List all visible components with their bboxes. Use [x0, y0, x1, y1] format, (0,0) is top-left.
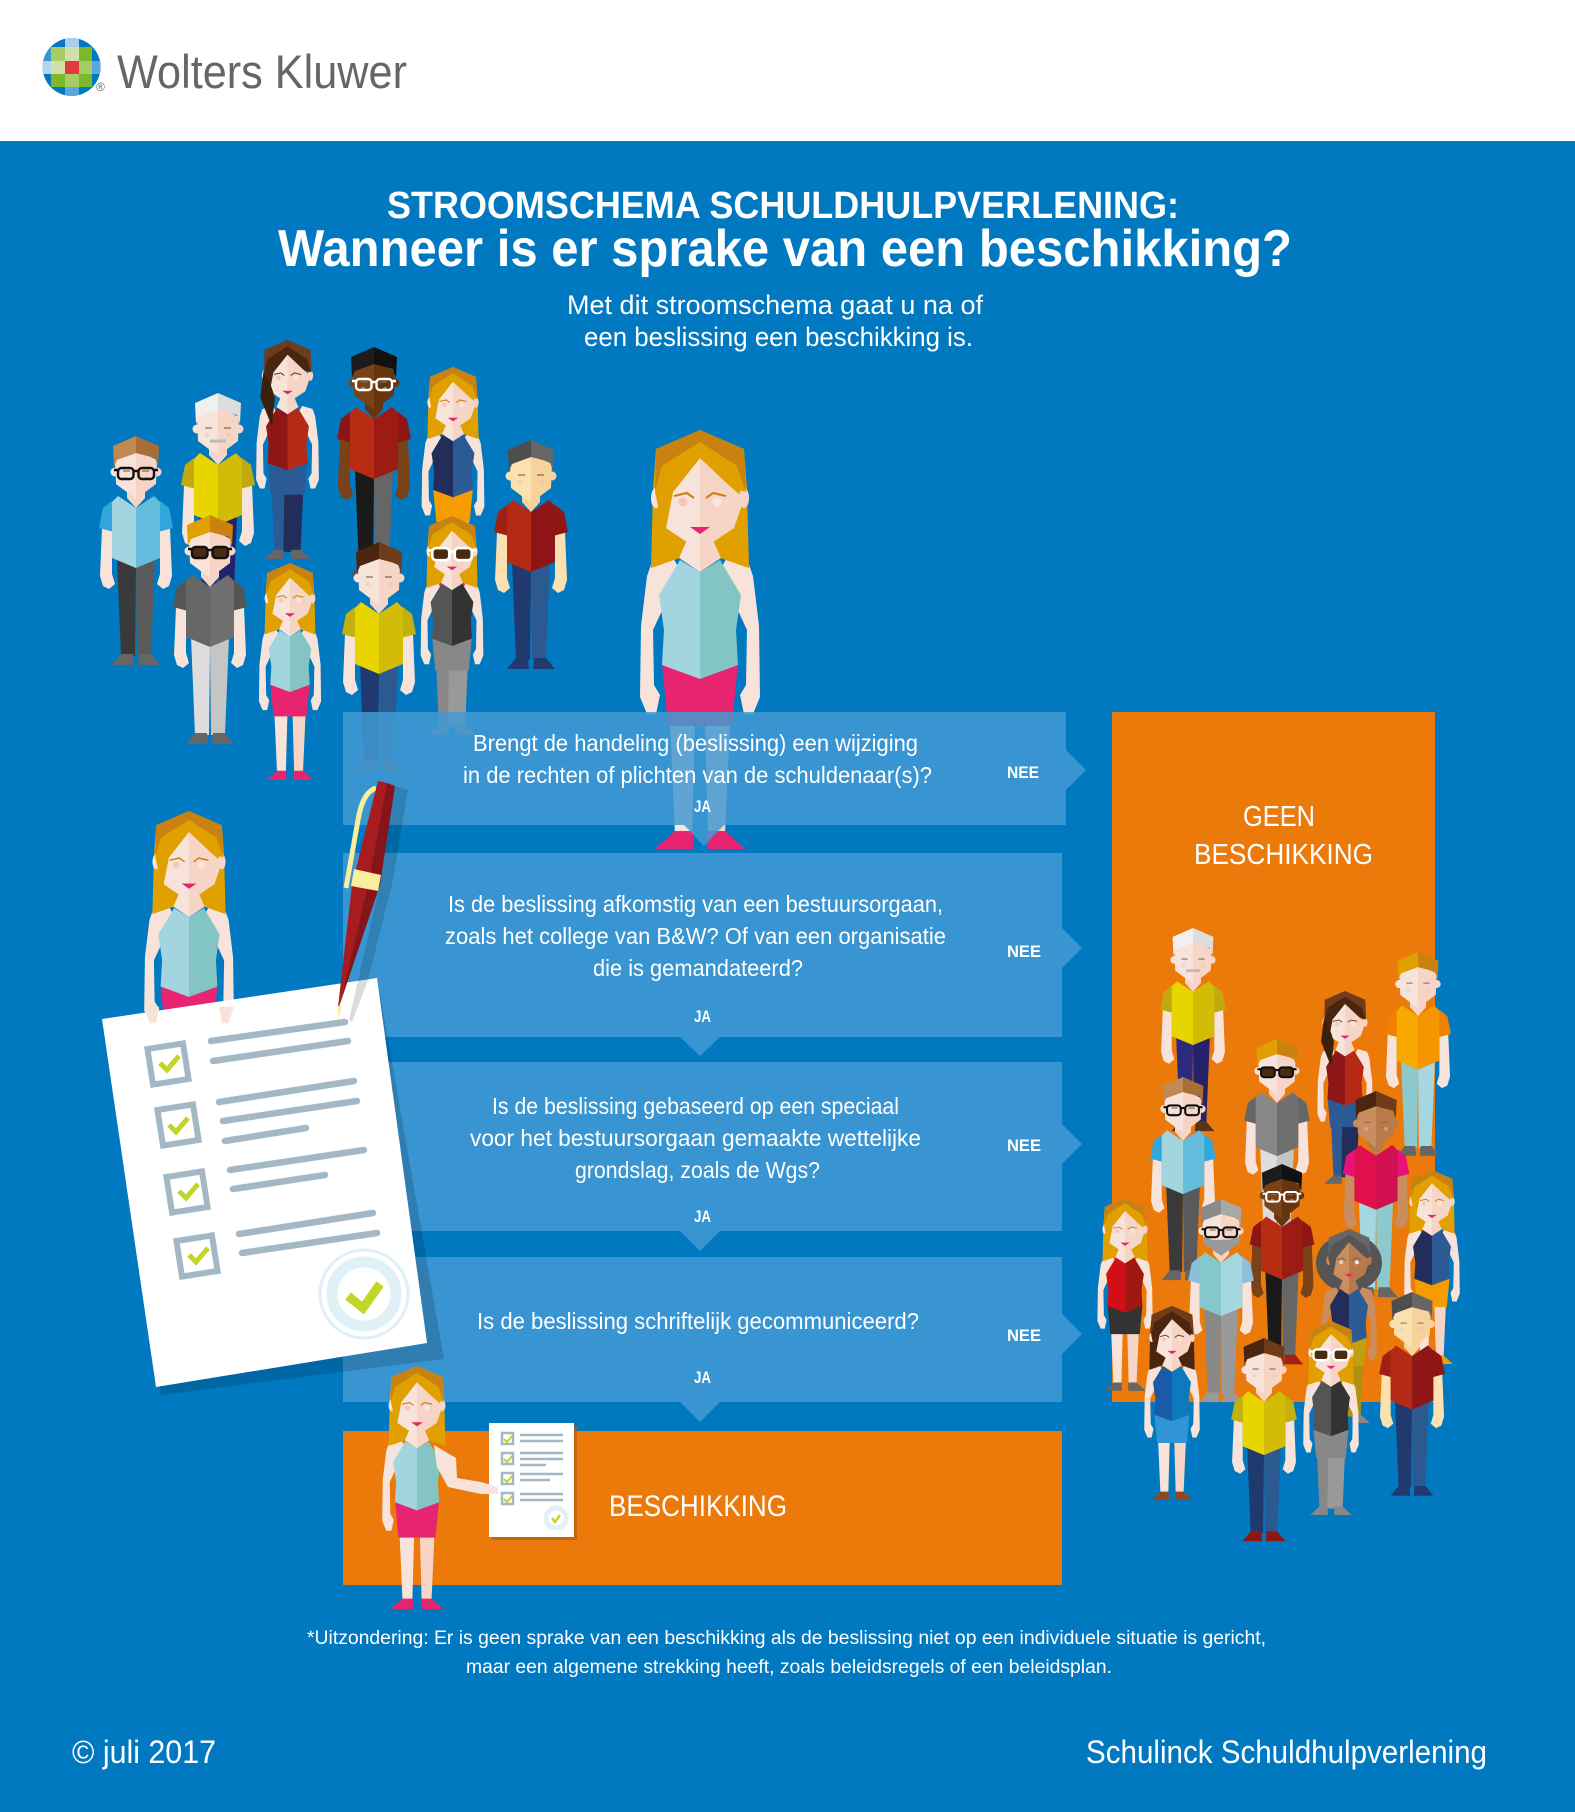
paper shadow — [150, 982, 444, 1395]
person: woman red top, black skirt — [1097, 1198, 1153, 1391]
illustration: woman presenting document — [382, 1366, 577, 1609]
checkboxes — [147, 1043, 218, 1277]
person: man sunglasses, grey shirt — [173, 515, 247, 744]
person: man brown hair, yellow shirt — [1231, 1338, 1297, 1541]
person: blond woman, navy top — [422, 367, 484, 586]
panel: question 4 — [343, 1257, 1082, 1422]
pen shadow — [349, 786, 408, 1022]
pen band — [351, 869, 381, 891]
pen tip — [338, 1006, 342, 1020]
person: woman behind paper — [144, 811, 234, 1124]
person: man tan skin, pink shirt — [1343, 1091, 1409, 1297]
person: man dark hair, red shirt — [494, 440, 568, 669]
pen body — [338, 781, 387, 1007]
result label: GEEN — [1243, 801, 1315, 833]
footnote — [307, 1628, 1266, 1678]
label: ja: JA — [694, 1207, 711, 1226]
title block — [278, 185, 1292, 352]
label: nee: NEE — [1007, 763, 1039, 782]
intro text — [567, 290, 983, 352]
label: ja: JA — [694, 1368, 711, 1387]
person: woman brown hair, blue top — [1144, 1306, 1200, 1500]
logo: Wolters Kluwer — [42, 37, 407, 98]
icon: logo globe — [42, 37, 102, 97]
question text — [445, 891, 946, 981]
panel shape with arrows — [343, 853, 1082, 1056]
label: nee: NEE — [1007, 1326, 1041, 1345]
person: man with glasses, blue shirt — [99, 436, 173, 665]
kicker heading: STROOMSCHEMA SCHULDHULPVERLENING: — [387, 185, 1179, 227]
checklist lines — [211, 1022, 377, 1253]
intro text: een beslissing een beschikking is. — [584, 322, 973, 352]
person: woman sunglasses, black vest — [1303, 1321, 1359, 1515]
registered mark: ® — [96, 80, 105, 94]
panel shape with arrows — [343, 1257, 1082, 1422]
box: geen beschikking — [1112, 712, 1435, 1402]
panel: question 2 — [343, 853, 1082, 1056]
label: nee: NEE — [1007, 942, 1041, 961]
result label: BESCHIKKING — [1194, 839, 1373, 871]
person: man brown hair, yellow shirt — [342, 542, 416, 771]
person: blond man, orange shirt — [1385, 952, 1451, 1156]
person: older man, yellow shirt — [181, 393, 255, 622]
pen clip — [346, 788, 376, 888]
footer: date: © juli 2017 — [72, 1734, 216, 1770]
panel: question 3 — [343, 1062, 1082, 1251]
question text: Is de beslissing gebaseerd op een speciaal — [492, 1093, 899, 1119]
question text: Is de beslissing schriftelijk gecommuniceerd? — [477, 1308, 919, 1334]
person: woman dark hair, red top — [1317, 991, 1373, 1184]
footnote: maar een algemene strekking heeft, zoals beleidsregels of een beleidsplan. — [466, 1657, 1112, 1678]
question text — [470, 1093, 921, 1183]
question text: Brengt de handeling (beslissing) een wijziging — [473, 730, 918, 756]
illustration: woman holding checklist — [102, 811, 444, 1395]
paper sheet — [102, 978, 427, 1387]
white header band — [0, 0, 1575, 141]
panel shape with arrows — [343, 1062, 1082, 1251]
pointing arm — [434, 1445, 498, 1494]
footer: source: Schulinck Schuldhulpverlening — [1086, 1734, 1487, 1770]
person: woman — [382, 1366, 452, 1609]
person: bearded man, light shirt — [1188, 1199, 1254, 1402]
person: man dark skin, white glasses — [337, 347, 411, 576]
orange result box — [343, 1431, 1062, 1585]
question text: grondslag, zoals de Wgs? — [575, 1157, 820, 1183]
person: man dark hair, red shirt — [1379, 1292, 1445, 1496]
stamp with check — [320, 1250, 408, 1338]
question text: Is de beslissing afkomstig van een bestuursorgaan, — [448, 891, 943, 917]
person: woman afro hair, navy top — [1316, 1229, 1382, 1423]
panel: question 1 — [343, 712, 1086, 846]
illustration: large woman behind first panel — [640, 430, 760, 849]
mini document — [489, 1423, 577, 1540]
question text: in de rechten of plichten van de schuldenaar(s)? — [463, 762, 932, 788]
question text — [463, 730, 932, 788]
label: ja: JA — [694, 1007, 711, 1026]
question text: voor het bestuursorgaan gemaakte wettelijke — [470, 1125, 921, 1151]
illustration: crowd top left — [99, 340, 568, 780]
illustration: crowd right — [1097, 928, 1460, 1541]
person: man sunglasses, grey shirt — [1244, 1039, 1310, 1242]
logo wordmark: Wolters Kluwer — [117, 45, 407, 98]
person: blond woman, navy top — [1404, 1170, 1460, 1364]
result label — [1194, 801, 1373, 871]
question text: zoals het college van B&W? Of van een organisatie — [445, 923, 946, 949]
person: older man, yellow shirt — [1160, 928, 1226, 1131]
person: man glasses, blue shirt — [1150, 1077, 1216, 1280]
footnote: *Uitzondering: Er is geen sprake van een beschikking als de beslissing niet op een individuele situatie is gericht, — [307, 1628, 1266, 1649]
orange result box — [1112, 712, 1435, 1402]
box: beschikking — [343, 1431, 1062, 1585]
hands over paper — [144, 1007, 234, 1023]
panel shape with arrows — [343, 712, 1086, 846]
label: ja: JA — [694, 797, 711, 816]
icon: pen — [338, 781, 408, 1022]
question text: die is gemandateerd? — [593, 955, 803, 981]
result label: BESCHIKKING — [609, 1490, 787, 1523]
intro text: Met dit stroomschema gaat u na of — [567, 290, 983, 320]
person: woman dark hair, red top — [256, 340, 319, 559]
person: woman teal top, pink skirt — [259, 563, 321, 780]
person: man dark skin, white glasses — [1250, 1164, 1314, 1364]
main heading: Wanneer is er sprake van een beschikking? — [278, 220, 1292, 278]
person: woman sunglasses, black vest — [421, 516, 483, 735]
label: nee: NEE — [1007, 1136, 1041, 1155]
